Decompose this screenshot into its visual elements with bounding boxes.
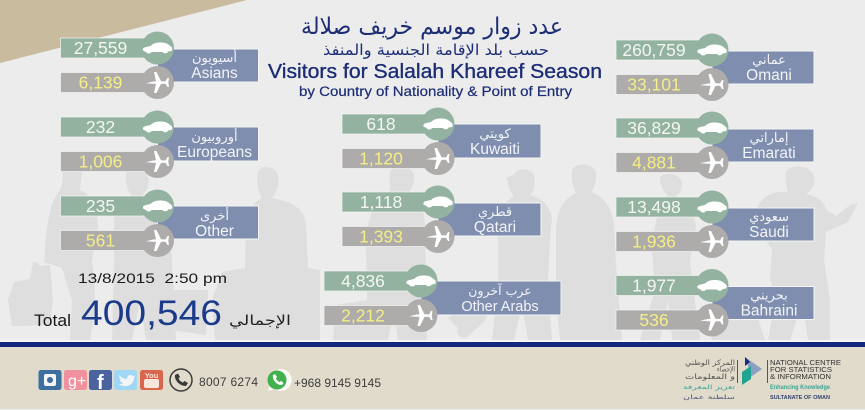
group: Europeans: أوروبيون [191, 128, 238, 145]
group: Emarati [616, 112, 814, 179]
group: Bahraini: بحريني [750, 288, 788, 304]
logo: national centre for statistics: FOR STATISTICS [770, 367, 832, 374]
icon: google plus [64, 370, 87, 390]
total: Total [34, 312, 71, 330]
logo: national centre for statistics: SULTANATE OF OMAN [770, 395, 830, 401]
group: Kuwaiti: 1,120 [359, 148, 403, 168]
total: 400,546 [81, 294, 222, 333]
group: Qatari [342, 186, 541, 253]
subtitle: Arabic: حسب بلد الإقامة الجنسية والمنفذ [323, 41, 549, 59]
group: Other Arabs: 2,212 [341, 306, 385, 326]
group: Omani: 260,759 [622, 40, 686, 60]
group: Omani: عماني [752, 53, 786, 68]
title: Arabic: عدد زوار موسم خريف صلالة [301, 14, 563, 40]
total: الإجمالي [229, 313, 291, 329]
logo: national centre for statistics: الإحصاء [717, 366, 735, 374]
group: Other [60, 190, 258, 257]
group: Emarati: إماراتي [750, 131, 788, 146]
group: Other: Other [195, 223, 234, 240]
logo: national centre for statistics: و المعلومات [685, 372, 735, 381]
group: Emarati: 36,829 [627, 118, 681, 138]
icon: twitter [114, 370, 137, 390]
title block [268, 14, 602, 99]
group: Asians [60, 32, 258, 99]
icon: facebook [89, 370, 112, 394]
silhouette: second traveller [112, 169, 176, 340]
silhouette: tall man in dishdasha [556, 164, 622, 340]
group: Other Arabs: Other Arabs [461, 299, 539, 315]
silhouette: walking traveller [640, 174, 700, 340]
group: Europeans: 1,006 [79, 152, 122, 172]
icon: whatsapp [268, 369, 292, 391]
subtitle: English: by Country of Nationality & Point of Entry [299, 84, 572, 99]
icon: phone [170, 369, 192, 391]
silhouette: man with cap and cart [448, 169, 552, 340]
group: Saudi [616, 190, 814, 258]
group: Other Arabs [324, 264, 561, 332]
group: Asians: 6,139 [79, 72, 122, 92]
silhouettes of travellers [8, 156, 858, 340]
group: Qatari: 1,393 [359, 226, 403, 246]
icon: youtube: You [145, 371, 159, 380]
group: Bahraini: 536 [639, 310, 669, 330]
group: Asians: أسيويون [192, 49, 237, 66]
group: Other: 561 [86, 230, 115, 250]
group: Kuwaiti: كويتي [479, 127, 511, 142]
group: Kuwaiti: 618 [366, 114, 396, 134]
group: Qatari: Qatari [474, 219, 516, 236]
icon: google plus: g+ [68, 373, 86, 390]
footer [0, 340, 865, 409]
group: Other: أخرى [200, 207, 229, 224]
logo: national centre for statistics: سلطنة عمان [683, 394, 735, 401]
total [34, 294, 291, 333]
silhouette: backpacker reading map [712, 166, 858, 340]
group: Europeans: 232 [86, 117, 115, 137]
logo: national centre for statistics [683, 357, 841, 401]
group: Qatari: 1,118 [360, 192, 402, 212]
group: Omani: Omani [746, 67, 792, 84]
group: Omani: 33,101 [627, 74, 681, 94]
logo: national centre for statistics: Enhancing Knowledge [770, 385, 831, 391]
group: Other Arabs: 4,836 [341, 271, 385, 291]
group: Europeans [60, 110, 258, 178]
group: Saudi: 13,498 [627, 197, 681, 217]
group: Other Arabs: عرب آخرون [468, 283, 532, 299]
title: English: Visitors for Salalah Khareef Season [268, 60, 602, 83]
group: Other: 235 [86, 196, 115, 216]
logo: national centre for statistics: NATIONAL CENTRE [770, 360, 841, 367]
silhouette: centre man with trolley [333, 167, 427, 340]
logo: national centre for statistics: تعزيز المعرفة [683, 384, 735, 391]
group: Bahraini [616, 269, 814, 336]
group: Europeans: Europeans [177, 144, 252, 161]
silhouette: seated man on luggage [168, 167, 320, 340]
whatsapp number: +968 9145 9145 [294, 376, 381, 390]
silhouette: woman with suitcase [8, 156, 98, 340]
icon: youtube [140, 370, 163, 390]
group: Qatari: قطري [478, 205, 512, 220]
group: Bahraini: 1,977 [632, 276, 676, 296]
date and time: 13/8/2015 2:50 pm [78, 270, 227, 286]
group: Bahraini: Bahraini [741, 302, 797, 320]
logo: national centre for statistics: المركز الوطني [685, 358, 735, 367]
group: Emarati: Emarati [742, 145, 796, 162]
group: Kuwaiti [342, 108, 541, 175]
group: Asians: Asians [191, 65, 238, 82]
icon: instagram [38, 370, 62, 390]
group: Saudi: سعودي [749, 210, 789, 225]
group: Saudi: 1,936 [632, 232, 676, 252]
tan corner shape [0, 0, 247, 63]
icon: facebook: f [97, 372, 104, 394]
phone number: 8007 6274 [199, 375, 258, 389]
group: Emarati: 4,881 [632, 152, 676, 172]
group: Saudi: Saudi [749, 224, 789, 241]
group: Kuwaiti: Kuwaiti [470, 141, 520, 158]
group: Asians: 27,559 [74, 38, 127, 58]
group: Omani [616, 34, 814, 101]
logo: national centre for statistics: & INFORMATION [770, 374, 831, 381]
